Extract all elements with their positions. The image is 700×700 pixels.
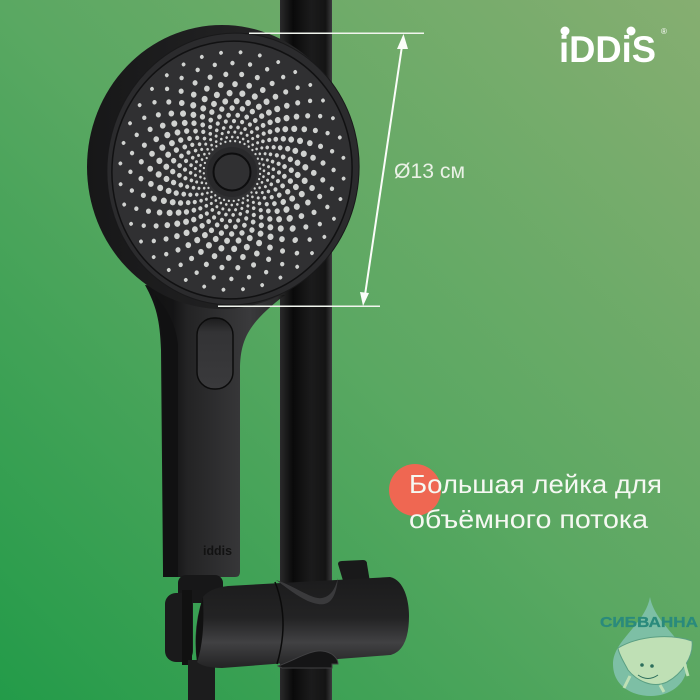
clamp body [195,577,409,668]
watermark tub [618,637,692,684]
rail collar top [276,578,338,604]
handle [145,285,285,577]
red accent circle [389,464,441,516]
watermark text: СИБВАННА [600,615,699,631]
dimension lines [218,32,424,307]
handle button [197,318,233,389]
center cap [207,147,257,197]
perforated face plate [99,29,365,311]
hose connector [165,575,223,700]
rail collar bottom [278,651,338,668]
head back shell [87,25,357,309]
watermark feet [624,662,688,692]
dimension arrow [360,34,408,306]
clamp end face [196,597,203,662]
watermark face [638,663,658,678]
head front ring [93,21,373,317]
dimension top line [249,32,424,34]
caption: объёмного потока [409,504,649,534]
caption: Большая лейка для [409,469,662,499]
slider clamp [165,560,409,700]
logo: iDDiS [559,29,656,70]
watermark drop [613,597,687,696]
dimension bottom line [218,306,380,307]
clamp knob [338,560,370,584]
watermark: sibvanna [600,597,699,696]
diameter label: Ø13 см [394,160,465,183]
shower rail [280,0,332,700]
spray nozzles [57,0,407,355]
handle logo: iddis [203,543,232,558]
logo: ® [661,27,667,36]
shower head with handle [57,0,407,577]
clamp seam [275,582,283,664]
caption [409,469,662,534]
